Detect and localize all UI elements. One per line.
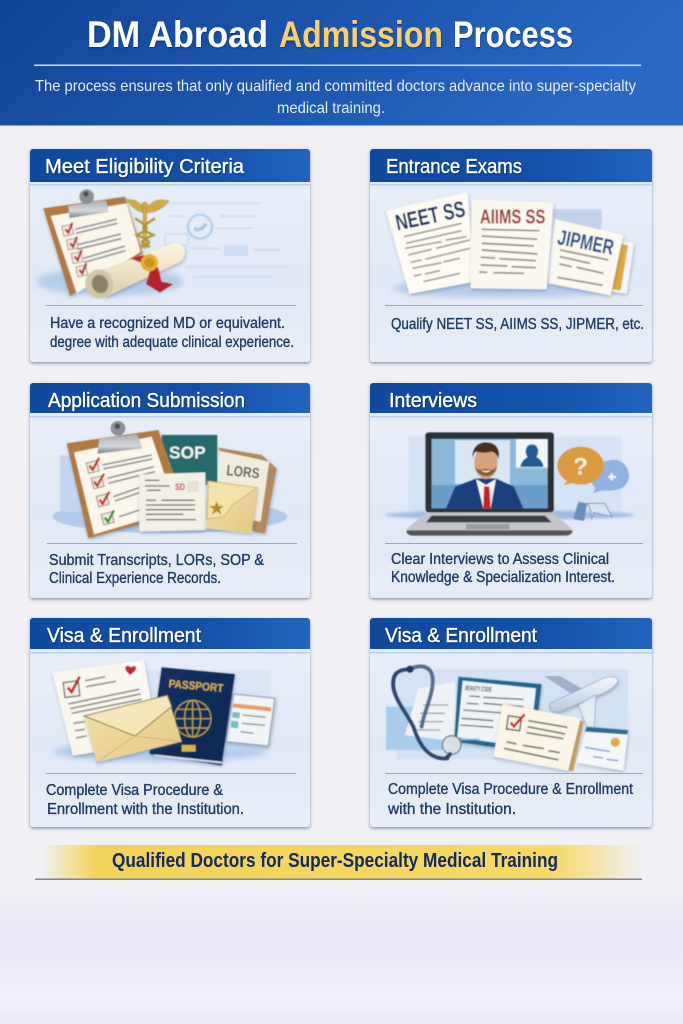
illustration: clipboard, SOP, LORs and envelope [53, 421, 287, 538]
header band [0, 0, 683, 126]
description: degree with adequate clinical experience. [50, 334, 294, 351]
panel: visa and enrollment right [370, 618, 652, 827]
description: Complete Visa Procedure & [46, 782, 224, 799]
description [387, 781, 634, 818]
subtitle: medical training. [277, 100, 385, 117]
description: Complete Visa Procedure & Enrollment [388, 781, 634, 798]
description: Clear Interviews to Assess Clinical [391, 551, 609, 568]
panel: interviews [370, 383, 652, 598]
illustration: clipboard, caduceus and diploma [37, 189, 287, 303]
heading: Meet Eligibility Criteria [45, 156, 245, 178]
books [573, 502, 587, 521]
banner text: Qualified Doctors for Super-Specialty Medical Training [112, 850, 558, 872]
description: Submit Transcripts, LORs, SOP & [49, 552, 265, 569]
speech bubbles [557, 447, 629, 493]
illustration: laptop video interview [385, 432, 635, 536]
JIPMER paper [548, 219, 634, 295]
panel: application submission [30, 383, 310, 598]
boarding pass [577, 727, 628, 771]
panel: visa and enrollment left [30, 618, 310, 827]
back note [405, 682, 457, 742]
title: Process [453, 14, 573, 55]
description [46, 782, 244, 818]
heading: Application Submission [48, 390, 245, 412]
airplane [544, 676, 618, 736]
subtitle: The process ensures that only qualified and committed doctors advance into super-specialty [35, 78, 636, 95]
description [391, 551, 615, 586]
illustration: stethoscope, documents and airplane [386, 666, 628, 772]
laptop [407, 432, 572, 536]
illustration: passport, envelope and documents [52, 660, 275, 765]
form sheet [139, 472, 206, 532]
title: DM Abroad [87, 14, 268, 55]
subtitle [35, 78, 636, 117]
title [87, 14, 573, 55]
diploma [97, 243, 185, 297]
AIIMS paper: AIIMS SS [480, 205, 545, 228]
envelope [84, 695, 182, 762]
heading: Interviews [389, 390, 477, 412]
heading: Visa & Enrollment [385, 625, 537, 647]
description [49, 552, 265, 587]
description: Knowledge & Specialization Interest. [391, 569, 615, 586]
caduceus [126, 199, 169, 248]
checklist paper [493, 704, 584, 772]
panel: entrance exams [370, 149, 652, 362]
letter [52, 660, 152, 756]
blue framed document [454, 677, 542, 753]
description: Have a recognized MD or equivalent. [50, 315, 285, 332]
NEET paper [386, 192, 475, 294]
title: Admission [279, 14, 443, 55]
passport: PASSPORT [168, 678, 224, 695]
heading: Entrance Exams [386, 156, 522, 178]
envelope [206, 481, 257, 533]
AIIMS paper [471, 199, 553, 289]
form sheet: SD [175, 482, 185, 492]
passport [149, 667, 235, 765]
JIPMER paper: JIPMER [556, 225, 616, 260]
description: Qualify NEET SS, AIIMS SS, JIPMER, etc. [391, 316, 644, 333]
footer banner [35, 845, 642, 880]
stethoscope [393, 666, 461, 758]
blue framed document: BEAUTY CODE [465, 685, 492, 694]
illustration: clipboard, SOP, LORs and envelope: LORS [226, 463, 261, 482]
description [50, 315, 294, 351]
illustration: exam papers [386, 192, 634, 298]
speech bubbles: ? [573, 453, 588, 480]
description: Clinical Experience Records. [49, 570, 221, 587]
heading: Visa & Enrollment [47, 625, 201, 647]
NEET paper: NEET SS [393, 195, 467, 236]
description: with the Institution. [387, 801, 516, 818]
description: Enrollment with the Institution. [47, 801, 244, 818]
panel: meet eligibility criteria [30, 149, 310, 362]
illustration: clipboard, SOP, LORs and envelope: SOP [169, 442, 206, 462]
id card [226, 694, 275, 746]
